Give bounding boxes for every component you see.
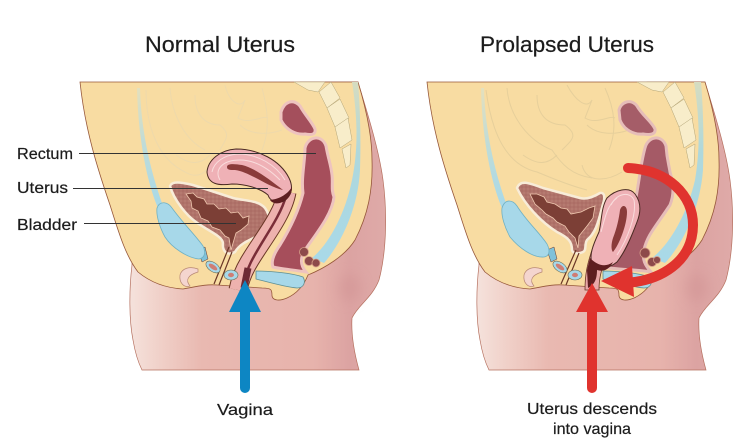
uterus descended xyxy=(587,190,640,288)
sacrum vertebrae xyxy=(637,82,696,168)
rectum xyxy=(272,138,334,272)
skin: lower body xyxy=(477,82,733,370)
arrow: blue vagina arrow xyxy=(229,280,261,393)
sacrum vertebrae xyxy=(294,82,352,168)
vagina tube xyxy=(585,250,605,290)
rectum upper loop xyxy=(619,102,655,134)
blue bladder-shaped sac xyxy=(157,203,205,259)
blue peritoneal strip xyxy=(481,88,507,208)
arrow: red upward arrow xyxy=(576,283,608,393)
label: Uterus line and text: Uterus xyxy=(17,180,68,197)
blue peritoneal strip xyxy=(137,88,163,208)
label: Uterus descends into vagina: Uterus descends xyxy=(527,401,657,418)
label: Bladder line and text: Bladder xyxy=(17,217,77,234)
pubic bone xyxy=(180,268,198,286)
label: Uterus descends into vagina xyxy=(527,401,657,438)
panel: normal uterus anatomy xyxy=(80,82,386,370)
pubic bone xyxy=(524,268,542,286)
skin: lower body xyxy=(130,82,386,370)
anal sphincter dots xyxy=(640,248,660,266)
label: Rectum line and text: Rectum xyxy=(17,146,73,163)
rectum xyxy=(609,138,673,272)
shaded skin patch xyxy=(339,274,361,302)
title: Prolapsed Uterus: Prolapsed Uterus xyxy=(480,32,654,57)
colon outline lines xyxy=(486,85,629,190)
uterus xyxy=(207,149,292,203)
body interior: yellow tissue xyxy=(427,82,719,300)
anal sphincter dots xyxy=(300,248,320,267)
lower blue sac xyxy=(603,271,651,288)
colon outline lines xyxy=(146,85,282,175)
bladder neck and urethra xyxy=(198,247,208,262)
right blue levator strip xyxy=(652,82,703,263)
small oval: urethra section xyxy=(551,259,569,275)
vagina tube xyxy=(238,192,287,290)
lower blue sac xyxy=(256,271,304,288)
right blue levator strip xyxy=(312,82,360,263)
small oval: clitoris section xyxy=(224,270,238,280)
panel: prolapsed uterus anatomy xyxy=(427,82,733,370)
shaded skin patch xyxy=(686,274,708,302)
title: Normal Uterus: Normal Uterus xyxy=(145,32,295,57)
bladder xyxy=(517,183,604,253)
blue bladder-shaped sac xyxy=(502,201,549,257)
body interior: yellow tissue xyxy=(80,82,372,300)
bladder neck and urethra xyxy=(547,247,557,262)
arrow: curved red descent arrow xyxy=(601,168,693,297)
rectum upper loop xyxy=(281,102,315,134)
small oval: urethra section xyxy=(204,259,222,275)
label: Uterus descends into vagina: into vagina xyxy=(553,421,631,438)
small oval: clitoris section xyxy=(568,270,582,280)
bladder xyxy=(170,182,269,254)
label: Vagina: Vagina xyxy=(217,402,273,419)
